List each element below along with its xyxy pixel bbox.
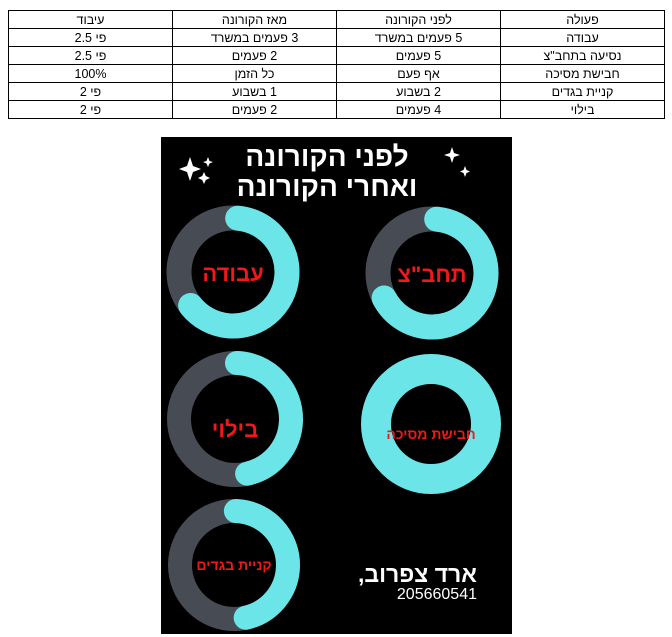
ring: clothes shopping	[178, 509, 290, 621]
ring: public transport: תחב"צ	[397, 262, 467, 287]
ring: mask: חבישת מסיכה	[386, 426, 476, 442]
data table: כל הזמן	[235, 66, 274, 80]
ring: work: עבודה	[202, 261, 264, 286]
data table: עבודה	[566, 30, 599, 44]
data table: פי 2.5	[75, 48, 106, 62]
icon: sparkles right	[444, 147, 470, 177]
title	[237, 141, 417, 202]
ring: leisure	[177, 361, 293, 477]
ring: clothes shopping: קניית בגדים	[196, 557, 272, 573]
data table: אף פעם	[397, 66, 440, 80]
data table: 4 פעמים	[396, 102, 441, 116]
data table: 2 פעמים	[232, 102, 277, 116]
author name	[358, 561, 477, 603]
data table: לפני הקורונה	[385, 12, 452, 26]
data table	[8, 10, 665, 119]
poster	[161, 137, 512, 634]
title: ואחרי הקורונה	[237, 171, 417, 202]
data table: פי 2	[80, 84, 101, 98]
data table: 100%	[74, 66, 106, 80]
data table: קניית בגדים	[552, 84, 613, 98]
ring: leisure: בילוי	[212, 417, 258, 442]
data table: 2 פעמים	[232, 48, 277, 62]
data table: 1 בשבוע	[232, 84, 277, 98]
author name: 205660541	[397, 586, 477, 603]
data table: 5 פעמים במשרד	[375, 30, 462, 44]
ring: work	[174, 213, 292, 331]
author name: ארד צפרוב,	[358, 561, 477, 587]
data table: בילוי	[571, 102, 594, 116]
data table: פי 2.5	[75, 30, 106, 44]
data table: נסיעה בתחב"צ	[543, 48, 622, 62]
data table: 2 בשבוע	[396, 84, 441, 98]
data table: 3 פעמים במשרד	[211, 30, 298, 44]
data table: חבישת מסיכה	[545, 66, 620, 80]
data table: 5 פעמים	[396, 48, 441, 62]
data table: מאז הקורונה	[222, 12, 287, 26]
title: לפני הקורונה	[245, 141, 409, 172]
icon: sparkles left	[179, 157, 213, 184]
ring: public transport	[373, 214, 491, 332]
data table: פי 2	[80, 102, 101, 116]
data table: עיבוד	[77, 12, 104, 26]
data table: פעולה	[566, 12, 599, 26]
ring: mask	[376, 369, 486, 479]
